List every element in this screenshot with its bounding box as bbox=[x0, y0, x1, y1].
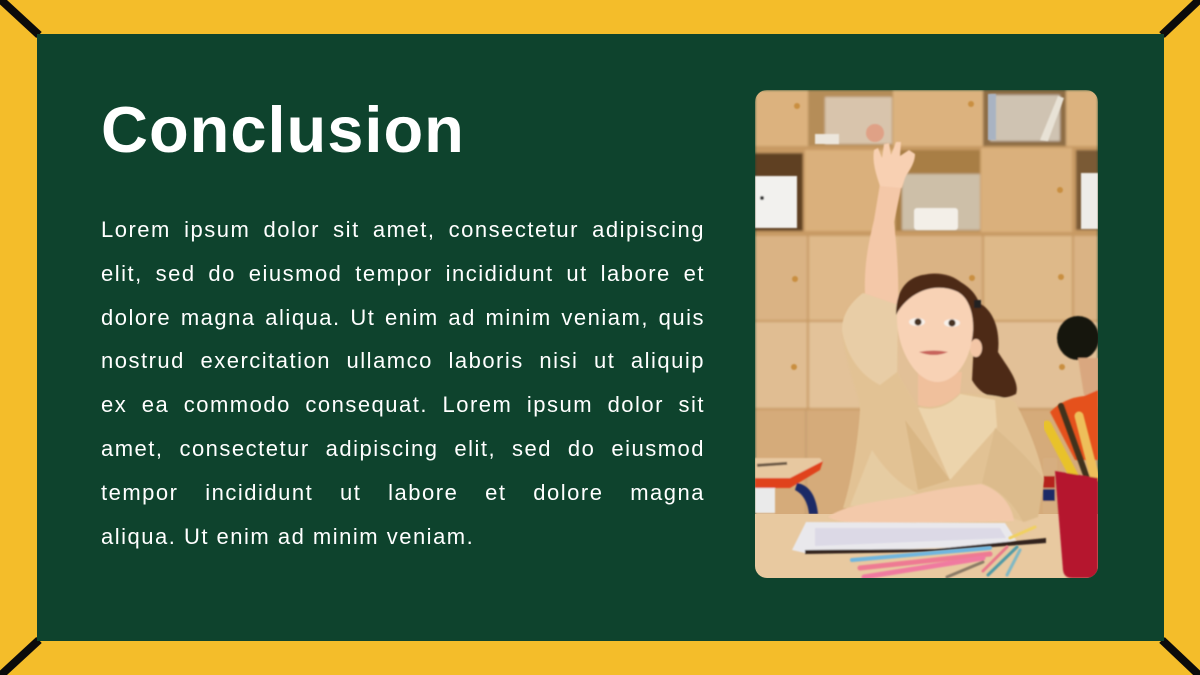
body text block: dolore magna aliqua. Ut enim ad minim veniam, quis bbox=[101, 305, 705, 330]
cabinet wall bbox=[755, 90, 1098, 520]
ear bbox=[970, 339, 982, 357]
raised arm bbox=[865, 184, 902, 306]
cabinet items bbox=[755, 94, 1098, 370]
dress bbox=[843, 393, 1045, 520]
body text block: Lorem ipsum dolor sit amet, consectetur adipiscing bbox=[101, 217, 705, 242]
photo: girl raising her hand in a classroom bbox=[755, 90, 1098, 578]
body text block: tempor incididunt ut labore et dolore magna bbox=[101, 480, 705, 505]
desk bbox=[755, 514, 1098, 578]
pigtail bbox=[972, 302, 1017, 398]
body text block: aliqua. Ut enim ad minim veniam. bbox=[101, 524, 474, 549]
girl bbox=[828, 142, 1044, 524]
eyes and mouth bbox=[909, 318, 925, 326]
resting arm bbox=[828, 484, 1014, 524]
fringe bbox=[895, 274, 979, 316]
pencil cup bbox=[1047, 406, 1098, 578]
neck bbox=[918, 372, 962, 407]
pencils on desk bbox=[852, 527, 1035, 577]
hand bbox=[873, 142, 915, 188]
body text block bbox=[101, 217, 705, 549]
background table and child bbox=[755, 316, 1099, 514]
body text block: nostrud exercitation ullamco laboris nisi ut aliquip bbox=[101, 348, 705, 373]
hair back bbox=[924, 272, 976, 342]
drawing paper bbox=[792, 522, 1046, 554]
body text block: elit, sed do eiusmod tempor incididunt ut labore et bbox=[101, 261, 705, 286]
body text block: ex ea commodo consequat. Lorem ipsum dolor sit bbox=[101, 392, 705, 417]
face bbox=[897, 284, 973, 382]
title: Conclusion bbox=[101, 93, 465, 166]
body text block: amet, consectetur adipiscing elit, sed do eiusmod bbox=[101, 436, 705, 461]
